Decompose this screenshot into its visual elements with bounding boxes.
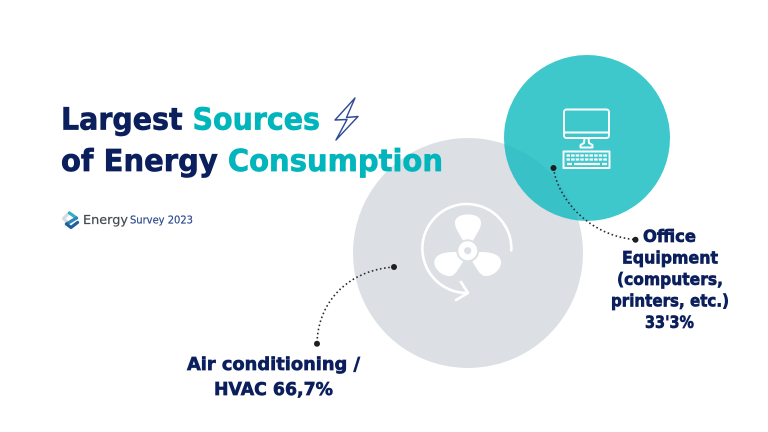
title [61, 102, 443, 179]
panel: office equipment circle [504, 55, 670, 221]
label: air conditioning: HVAC 66,7% [214, 379, 333, 400]
logo: Energy Survey 2023 [64, 212, 193, 228]
label: office equipment [611, 227, 729, 333]
panel: air conditioning circle [353, 138, 583, 368]
title line 1: Largest Sources [61, 102, 320, 138]
icon: logo mark [64, 213, 78, 228]
title line 2: of Energy Consumption [61, 144, 443, 179]
connector: air conditioning [314, 264, 397, 347]
label: office equipment: Equipment [622, 248, 718, 268]
label: office equipment: 33'3% [645, 313, 694, 333]
icon: fan [422, 204, 511, 300]
keyboard [564, 152, 610, 168]
logo wordmark: Energy [83, 212, 129, 227]
fan blades [434, 214, 501, 276]
fan hub [456, 239, 479, 262]
logo survey year: Survey 2023 [130, 214, 193, 226]
connector: office equipment [550, 165, 638, 243]
label: office equipment: Office [643, 227, 696, 247]
rotation arrow [422, 204, 511, 293]
label: office equipment: (computers, [617, 270, 723, 290]
monitor [564, 110, 609, 138]
label: air conditioning: Air conditioning / [187, 354, 360, 375]
label: air conditioning [187, 354, 360, 400]
icon: lightning bolt [335, 98, 358, 140]
monitor stand [580, 138, 592, 148]
icon: computer [564, 110, 610, 168]
label: office equipment: printers, etc.) [611, 292, 729, 312]
